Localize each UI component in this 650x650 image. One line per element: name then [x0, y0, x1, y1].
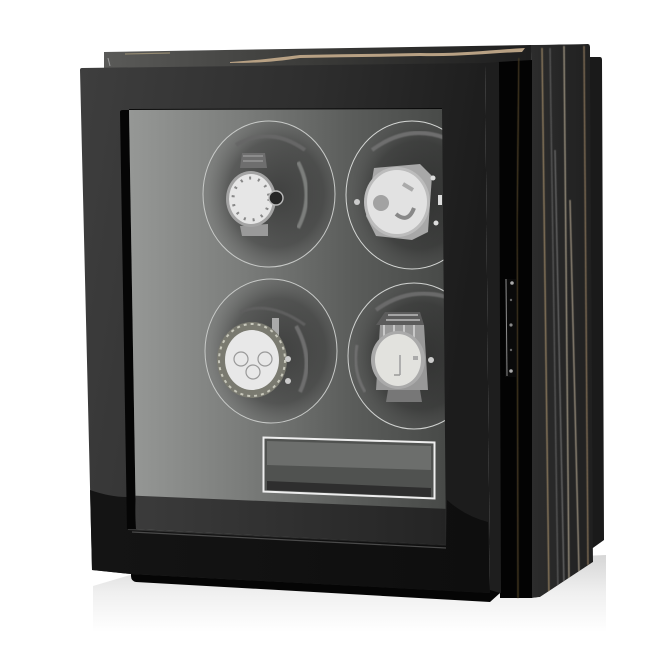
window lower lip highlight — [132, 532, 446, 548]
door frame — [80, 63, 490, 593]
lower reflection band — [136, 496, 446, 545]
hinge hardware — [505, 279, 516, 377]
gap veneer line — [517, 58, 519, 598]
winder: top-right — [346, 120, 444, 270]
wood top panel — [104, 45, 531, 72]
floor shadow — [93, 555, 606, 632]
winder: top-left — [203, 121, 335, 267]
product photo: four-watch winder cabinet — [80, 44, 606, 611]
glass window — [129, 109, 446, 545]
lower glossy band — [90, 490, 490, 593]
side panel with veneer stripes — [531, 44, 593, 598]
display plate — [263, 437, 435, 499]
base foot — [131, 572, 500, 602]
winder: bottom-right — [348, 282, 445, 430]
black inner window edge — [120, 110, 136, 529]
rear step panel — [585, 57, 604, 550]
black gap between door and cabinet — [498, 60, 532, 598]
winder: bottom-left — [205, 279, 337, 423]
door side strip — [485, 62, 501, 596]
